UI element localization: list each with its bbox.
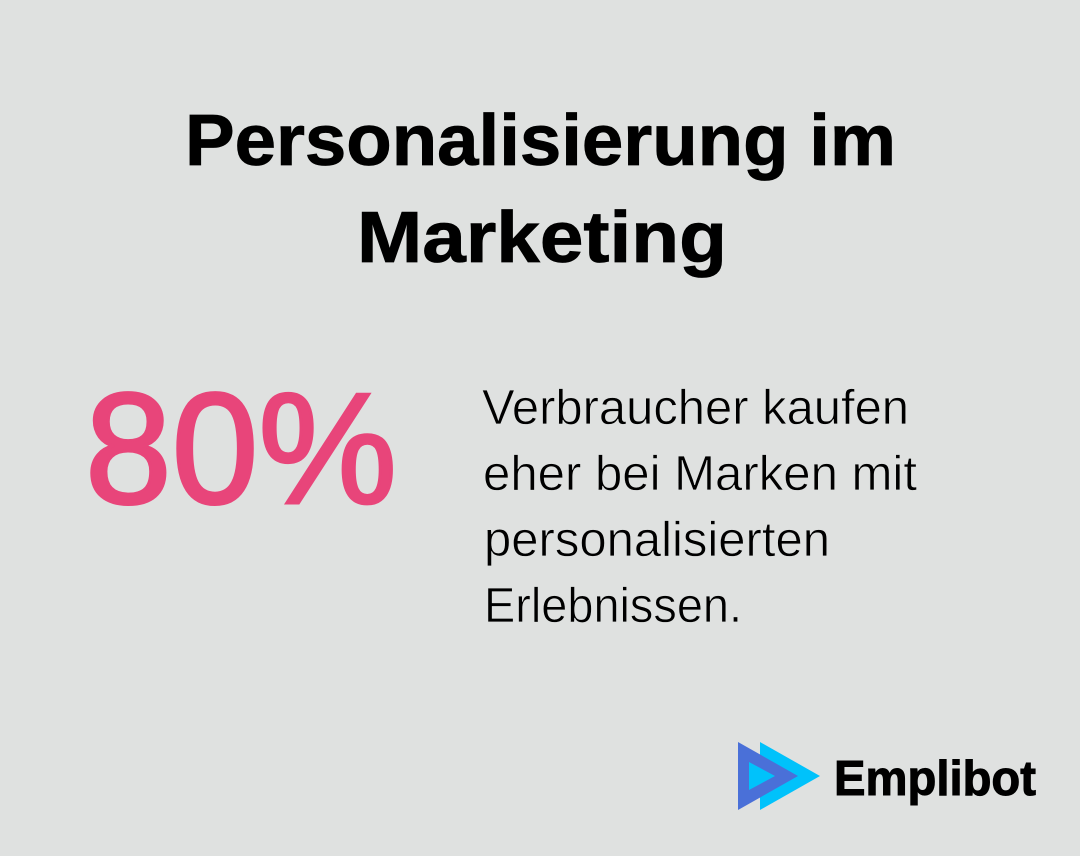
description text: Erlebnissen. (484, 579, 742, 633)
description text: Verbraucher kaufen (482, 381, 909, 435)
title: Marketing (357, 198, 727, 278)
description text: personalisierten (484, 513, 830, 567)
description text: eher bei Marken mit (483, 447, 917, 501)
logo wordmark: Emplibot (834, 752, 1036, 806)
icon: play triangles (738, 742, 820, 810)
description text (482, 381, 917, 633)
title (185, 101, 896, 278)
title: Personalisierung im (185, 101, 896, 181)
statistic: 80%: 80% (85, 361, 397, 537)
logo: Emplibot (738, 742, 1036, 810)
